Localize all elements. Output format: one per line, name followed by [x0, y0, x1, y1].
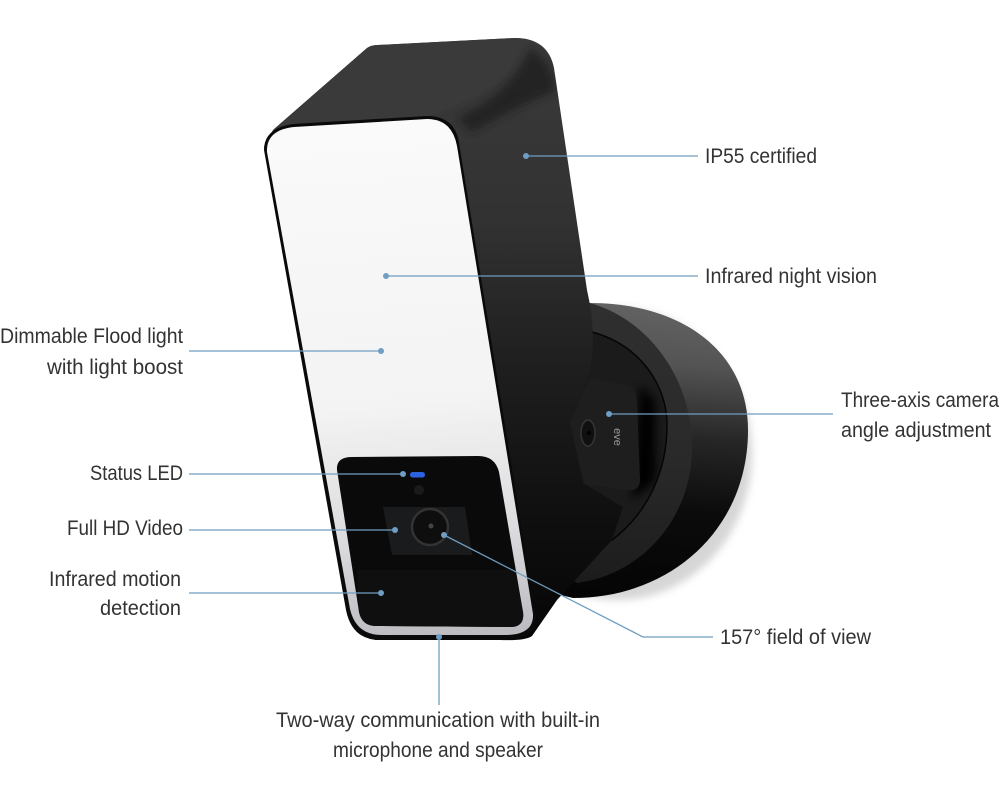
- callout: Two-way communication: microphone and speaker: [333, 739, 543, 762]
- housing top: [273, 38, 545, 130]
- callout: Dimmable Flood light: [0, 325, 384, 379]
- callout: Infrared night vision: [383, 265, 877, 288]
- callout: Infrared night vision: Infrared night vision: [705, 265, 877, 288]
- callout: IP55 certified: IP55 certified: [705, 145, 817, 168]
- camera panel: [337, 456, 523, 627]
- callout: Three-axis camera angle adjustment: [606, 389, 999, 442]
- brand mark: eve: [611, 428, 623, 446]
- callout: Two-way communication: Two-way communication with built-in: [276, 709, 600, 732]
- wall mount disc: [562, 303, 755, 603]
- callout: Infrared motion detection: detection: [100, 597, 181, 620]
- hinge block: [570, 378, 640, 490]
- callout: Dimmable Flood light: with light boost: [46, 356, 183, 379]
- housing fold shading: [458, 48, 556, 132]
- callout: Status LED: [90, 462, 406, 485]
- camera lens: [412, 509, 448, 545]
- housing side: [264, 38, 623, 640]
- callout: 157 degree field of view: [441, 532, 872, 649]
- callout: Full HD Video: Full HD Video: [67, 517, 183, 540]
- callout: Status LED: Status LED: [90, 462, 183, 485]
- light panel: [267, 119, 533, 635]
- status LED: [410, 472, 425, 478]
- callout: Three-axis camera angle adjustment: angle adjustment: [841, 419, 991, 442]
- product: floodlight camera: [264, 38, 752, 640]
- callout: Infrared motion detection: [49, 568, 384, 620]
- callout: IP55 certified: [523, 145, 817, 168]
- callout: Full HD Video: [67, 517, 398, 540]
- front rim: [264, 116, 536, 640]
- callout: Dimmable Flood light: Dimmable Flood light: [0, 325, 183, 348]
- callout: Two-way communication: [276, 634, 600, 762]
- lens window: [383, 507, 472, 555]
- hinge screw: [581, 420, 595, 446]
- sensor dot: [414, 485, 424, 495]
- callout: 157 degree field of view: 157° field of view: [720, 626, 872, 649]
- callout: Infrared motion detection: Infrared motion: [49, 568, 181, 591]
